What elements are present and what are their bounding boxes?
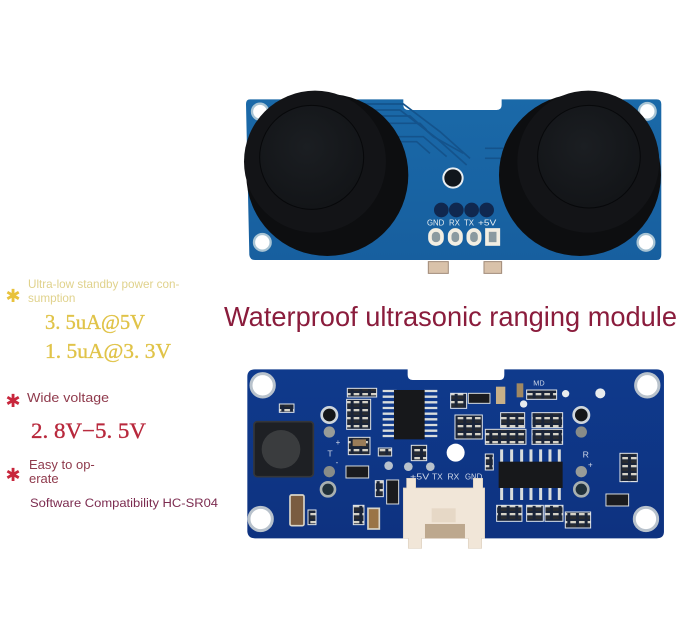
asterisk yellow: ✱ (5, 286, 21, 307)
transistors (346, 393, 629, 506)
compatibility note: Software Compatibility HC-SR04 (30, 496, 218, 510)
asterisk crimson: ✱ (5, 465, 21, 486)
inductor (254, 422, 313, 477)
silkscreen labels: TX (432, 471, 443, 481)
voltage range value: 2. 8V−5. 5V (31, 418, 146, 443)
pin pads (430, 230, 498, 244)
main IC chip (383, 390, 437, 439)
silkscreen labels: RX (447, 471, 460, 481)
pin labels: +5V (478, 219, 497, 228)
silkscreen labels: +5V (410, 471, 430, 481)
feature: wide voltage (5, 390, 146, 443)
small vias (384, 388, 605, 471)
component pads (279, 388, 637, 528)
corner mounting holes (252, 103, 656, 251)
mounting holes (249, 374, 659, 531)
pin labels: TX (464, 219, 475, 228)
operate heading: erate (29, 471, 59, 486)
circuit traces (363, 104, 503, 165)
pin labels (427, 219, 497, 228)
asterisk red: ✱ (5, 391, 21, 412)
module title: Waterproof ultrasonic ranging module (224, 301, 677, 332)
connector tabs (428, 262, 502, 273)
right transducer (499, 91, 661, 256)
sensor through holes (321, 407, 589, 496)
small capacitors (290, 383, 523, 529)
silkscreen labels: MD (533, 379, 545, 388)
standby current values: 3. 5uA@5V (45, 310, 145, 334)
feature: standby power (5, 278, 179, 363)
solder joints (434, 203, 494, 217)
left transducer (244, 91, 408, 256)
silkscreen labels: GND (465, 471, 482, 481)
pin labels: GND (427, 219, 445, 228)
op-amp IC chip (499, 449, 563, 500)
silkscreen labels: T (327, 449, 333, 459)
top sensor board (244, 91, 661, 273)
feature: easy to operate (5, 457, 218, 510)
silkscreen labels: + (588, 460, 593, 469)
white JST connector (403, 478, 485, 548)
operate heading: Easy to op- (29, 457, 95, 472)
bottom circuit board (247, 369, 664, 548)
centre hole (443, 168, 463, 188)
silkscreen labels: R (583, 449, 589, 459)
standby heading: sumption (28, 292, 75, 305)
silkscreen labels (327, 379, 593, 481)
top board PCB (246, 99, 661, 260)
standby heading: Ultra-low standby power con- (28, 278, 179, 291)
bottom board PCB (247, 369, 664, 538)
silkscreen labels: - (336, 458, 339, 467)
silkscreen labels: + (336, 438, 341, 447)
standby current values: 1. 5uA@3. 3V (45, 339, 171, 363)
pin labels: RX (449, 219, 461, 228)
voltage heading: Wide voltage (27, 390, 109, 405)
